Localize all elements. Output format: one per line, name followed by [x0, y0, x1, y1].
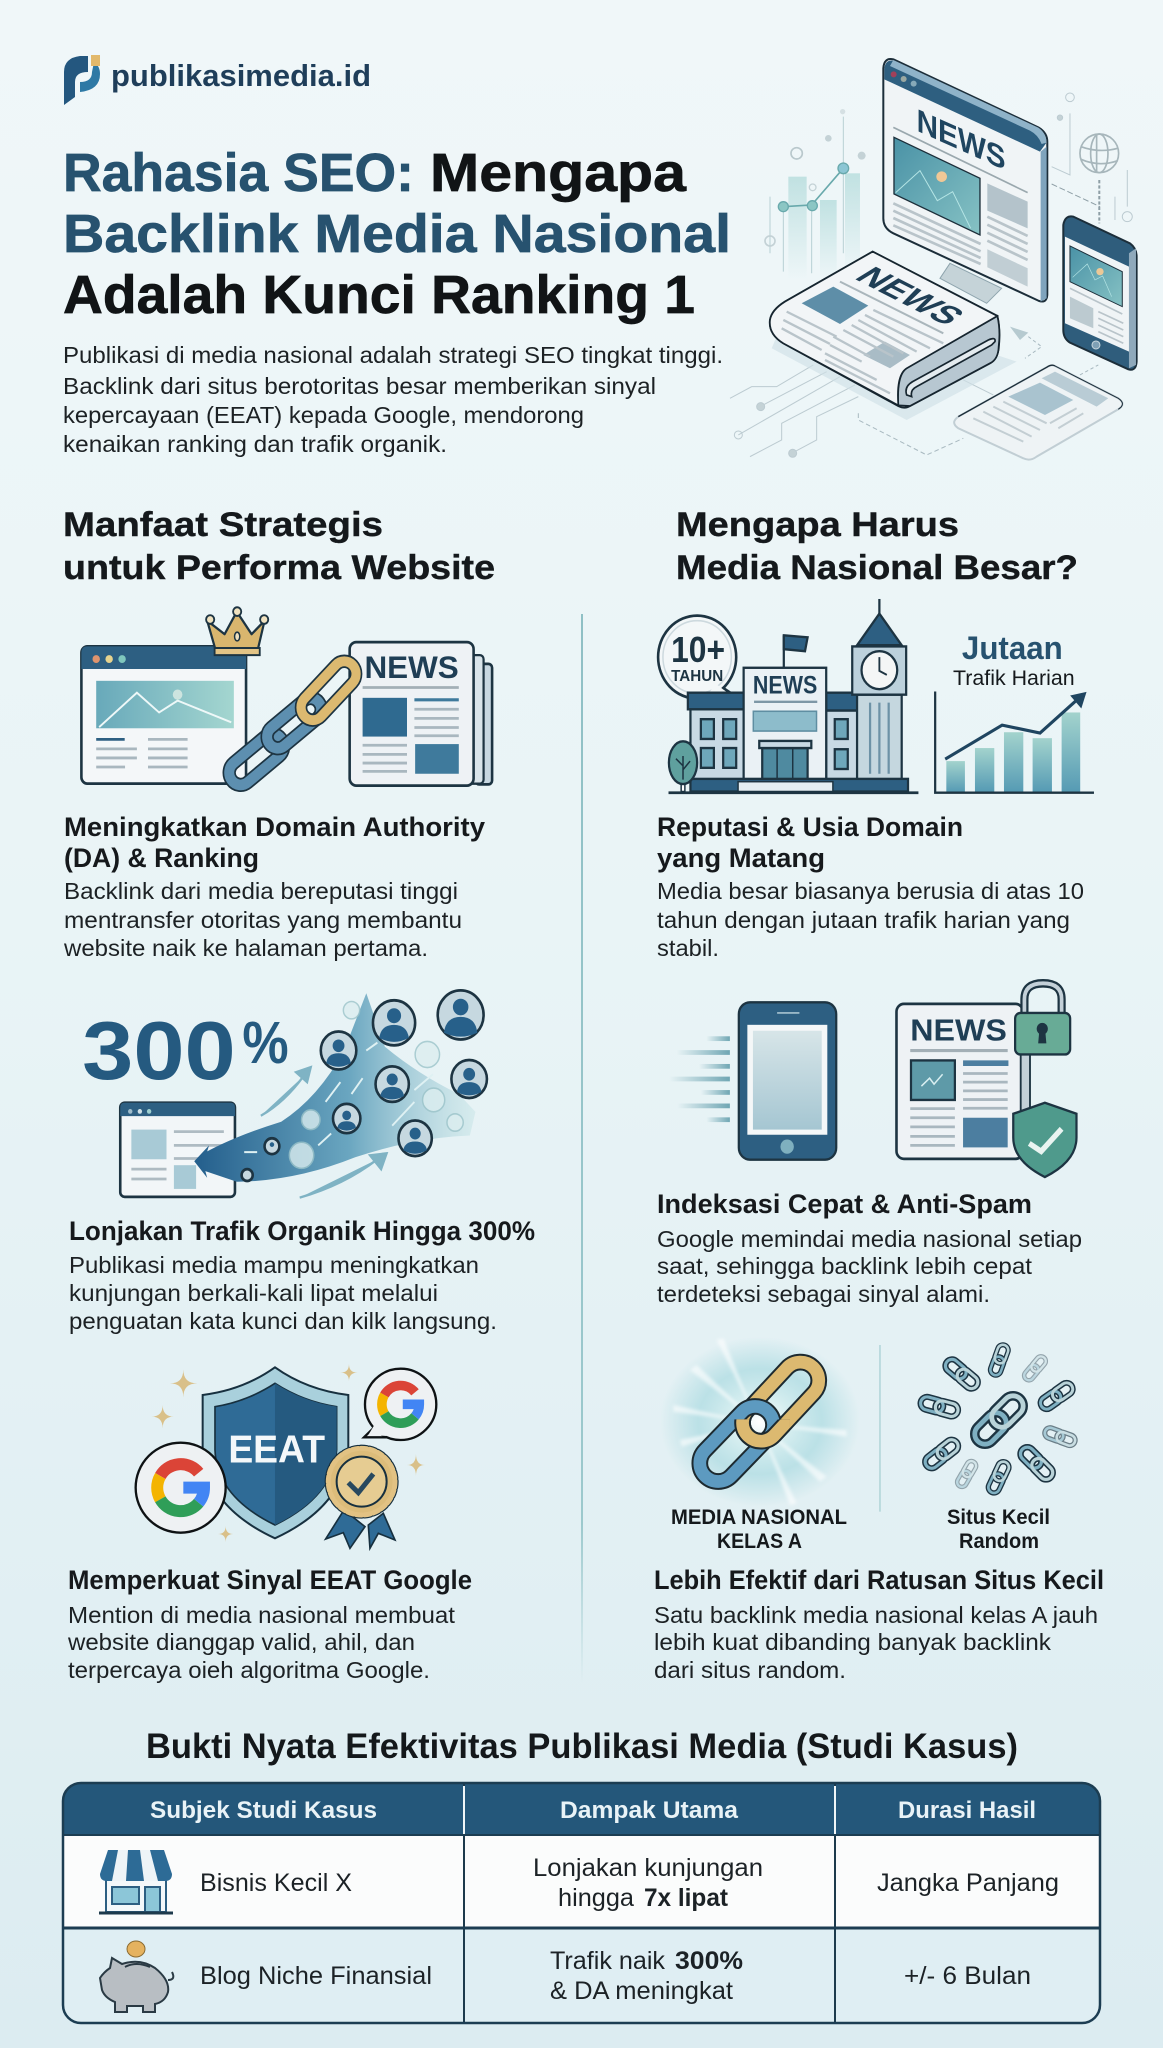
shield	[203, 1367, 348, 1538]
speed lines	[669, 1036, 730, 1122]
icon: scattered small links	[919, 1343, 1077, 1495]
intro paragraph: kepercayaan (EEAT) kepada Google, mendorong	[63, 402, 584, 428]
row: finance blog: Blog Niche Finansial	[200, 1962, 432, 1990]
text block: domain authority: Meningkatkan Domain Authority	[64, 812, 485, 842]
comparison labels: Situs Kecil	[947, 1506, 1050, 1529]
row: small business: hingga	[558, 1884, 634, 1912]
title: Mengapa	[430, 143, 687, 203]
text block: domain reputation: tahun dengan jutaan trafik harian yang	[657, 907, 1070, 933]
panel: benefits heading: Manfaat Strategis	[63, 506, 383, 544]
text block: organic traffic: Lonjakan Trafik Organik Hingga 300%	[69, 1216, 535, 1246]
text block: domain authority: website naik ke halaman pertama.	[63, 935, 428, 961]
illustration: 300% traffic surge	[82, 990, 487, 1198]
phone	[1063, 216, 1137, 370]
icon: quality badge	[326, 1448, 395, 1548]
speech bubble: 10+ years: TAHUN	[671, 667, 723, 685]
icon: globe	[1080, 134, 1119, 173]
icon: big chain link	[692, 1355, 826, 1489]
title	[63, 143, 731, 325]
text block: EEAT signal: Mention di media nasional membuat	[68, 1602, 456, 1628]
big number: %	[242, 1011, 289, 1077]
text block: domain reputation	[657, 812, 1084, 961]
text block: more effective: dari situs random.	[654, 1657, 846, 1683]
case study table	[63, 1783, 1100, 2023]
text block: fast indexing: Indeksasi Cepat & Anti-Spam	[657, 1189, 1032, 1219]
monitor: NEWS	[917, 102, 1006, 177]
text block: fast indexing	[657, 1189, 1082, 1307]
separator	[879, 1345, 881, 1512]
text block: organic traffic	[69, 1216, 535, 1334]
text block: domain reputation: yang Matang	[657, 843, 825, 873]
table header: Durasi Hasil	[898, 1797, 1036, 1824]
intro paragraph	[63, 342, 723, 457]
text block: fast indexing: saat, sehingga backlink lebih cepat	[657, 1253, 1033, 1279]
icon: piggy bank	[100, 1941, 173, 2012]
illustration: browser, crown, chain, news	[81, 607, 492, 790]
column divider	[581, 614, 583, 1684]
speech bubble: 10+ years	[658, 616, 736, 699]
logo text: publikasimedia.id	[111, 58, 371, 93]
row: finance blog: 300%	[675, 1947, 743, 1975]
monitor	[883, 59, 1047, 303]
panel: benefits heading: untuk Performa Website	[63, 549, 495, 587]
text block: domain authority: (DA) & Ranking	[64, 843, 259, 873]
newspaper: NEWS	[364, 650, 459, 685]
comparison labels: Random	[959, 1530, 1039, 1553]
text block: EEAT signal: terpercaya oieh algoritma Google.	[68, 1657, 430, 1683]
traffic chart: Jutaan	[962, 630, 1063, 666]
text block: EEAT signal	[67, 1565, 472, 1683]
text block: fast indexing: terdeteksi sebagai sinyal alami.	[657, 1281, 990, 1307]
table body	[63, 1783, 1100, 2023]
illustration: EEAT shield with Google badges	[136, 1364, 436, 1548]
row: small business: Jangka Panjang	[877, 1869, 1059, 1897]
comparison labels: KELAS A	[717, 1530, 802, 1553]
case study heading: Bukti Nyata Efektivitas Publikasi Media (Studi Kasus)	[146, 1727, 1018, 1766]
browser window	[81, 646, 246, 784]
icon: shield check	[1013, 1103, 1076, 1177]
text block: domain reputation: stabil.	[657, 935, 719, 961]
phone	[739, 1002, 836, 1160]
speech bubble: 10+ years: 10+	[671, 630, 725, 670]
icon: Google speech bubble	[364, 1369, 436, 1440]
table header: Subjek Studi Kasus	[150, 1797, 377, 1824]
panel: why national media heading	[676, 506, 1078, 587]
row: finance blog	[100, 1941, 1031, 2012]
text block: more effective	[654, 1565, 1104, 1683]
text block: more effective: Satu backlink media nasional kelas A jauh	[654, 1602, 1098, 1628]
small website	[120, 1103, 235, 1197]
illustration: phone and secure news	[669, 983, 1076, 1177]
glow	[660, 1337, 860, 1507]
text block: domain reputation: Reputasi & Usia Domain	[657, 812, 963, 842]
title: Rahasia SEO:	[63, 143, 414, 203]
panel: benefits heading	[63, 506, 495, 587]
news building	[669, 599, 918, 793]
panel: why national media heading: Mengapa Harus	[676, 506, 959, 544]
table header: Dampak Utama	[560, 1797, 739, 1824]
shield: EEAT	[228, 1428, 325, 1472]
logo	[64, 55, 371, 105]
table header	[150, 1797, 1036, 1824]
intro paragraph: kenaikan ranking dan trafik organik.	[63, 431, 447, 457]
big number: 300	[82, 1005, 236, 1097]
comparison labels: MEDIA NASIONAL	[671, 1506, 847, 1529]
row: small business: Bisnis Kecil X	[200, 1869, 352, 1897]
icon: store	[99, 1850, 173, 1913]
news page: NEWS	[910, 1014, 1007, 1048]
intro paragraph: Backlink dari situs berotoritas besar memberikan sinyal	[63, 373, 656, 399]
row: finance blog: +/- 6 Bulan	[904, 1962, 1031, 1990]
illustration: strong link versus scattered small links	[660, 1337, 1077, 1512]
text block: fast indexing: Google memindai media nasional setiap	[657, 1226, 1082, 1252]
text block: more effective: Lebih Efektif dari Ratusan Situs Kecil	[654, 1565, 1104, 1595]
row: finance blog: Trafik naik	[550, 1947, 665, 1975]
traffic stream	[194, 993, 475, 1198]
news page	[896, 1004, 1023, 1159]
comparison labels	[671, 1506, 1050, 1553]
text block: domain reputation: Media besar biasanya berusia di atas 10	[657, 878, 1084, 904]
traffic chart	[935, 630, 1094, 793]
text block: domain authority: mentransfer otoritas yang membantu	[64, 907, 462, 933]
newspaper: NEWS	[847, 262, 973, 330]
row: small business: Lonjakan kunjungan	[533, 1854, 763, 1882]
text block: organic traffic: penguatan kata kunci dan kilk langsung.	[69, 1308, 497, 1334]
text block: organic traffic: Publikasi media mampu meningkatkan	[69, 1252, 479, 1278]
row: finance blog: & DA meningkat	[550, 1977, 733, 2005]
icon: chain	[225, 656, 361, 790]
icon: logo mark	[64, 55, 100, 105]
row: small business	[99, 1850, 1059, 1913]
icon: Google left	[136, 1443, 226, 1533]
icon: padlock	[1015, 983, 1070, 1112]
title: Adalah Kunci Ranking 1	[63, 265, 695, 325]
text block: more effective: lebih kuat dibanding banyak backlink	[654, 1629, 1052, 1655]
circuit lines	[730, 93, 1132, 457]
sparkles	[151, 1364, 425, 1542]
hero illustration: news on monitor, newspaper, phone	[730, 59, 1137, 460]
traffic chart: Trafik Harian	[953, 666, 1075, 690]
panel: why national media heading: Media Nasional Besar?	[676, 549, 1078, 587]
tablet sheet	[954, 365, 1122, 460]
icon: crown	[206, 607, 268, 655]
text block: EEAT signal: Memperkuat Sinyal EEAT Google	[68, 1565, 472, 1595]
text block: domain authority: Backlink dari media bereputasi tinggi	[64, 878, 458, 904]
illustration: building and traffic chart	[658, 599, 1094, 793]
news building: NEWS	[753, 672, 817, 700]
users	[242, 990, 487, 1181]
big number	[82, 1005, 289, 1097]
text block: EEAT signal: website dianggap valid, ahil, dan	[67, 1629, 415, 1655]
intro paragraph: Publikasi di media nasional adalah strategi SEO tingkat tinggi.	[63, 342, 723, 368]
newspaper	[770, 252, 1017, 420]
title: Backlink Media Nasional	[63, 204, 731, 264]
text block: domain authority	[63, 812, 485, 961]
row: small business: 7x lipat	[644, 1884, 729, 1912]
chart backdrop	[765, 109, 866, 280]
text block: organic traffic: kunjungan berkali-kali lipat melalui	[69, 1280, 438, 1306]
newspaper	[350, 642, 492, 786]
